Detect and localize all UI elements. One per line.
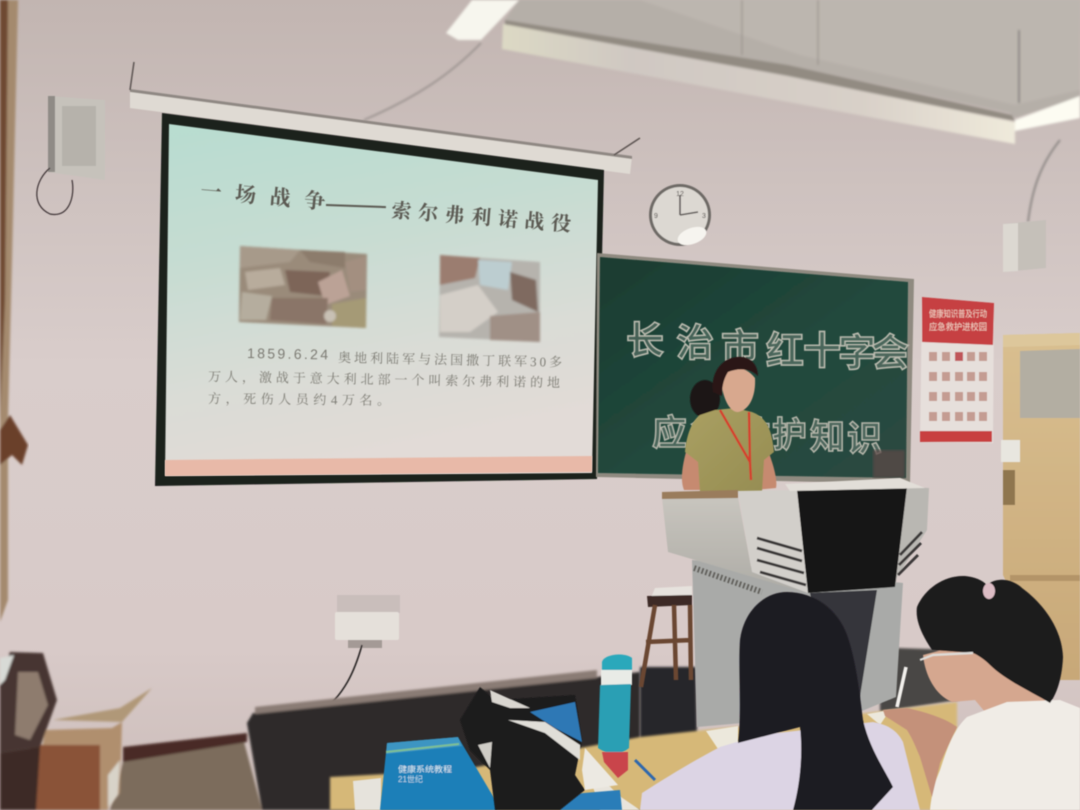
ceiling and fluorescent lamps: [364, 0, 1080, 222]
wall clock: 9: [654, 213, 658, 220]
left student: [640, 592, 920, 810]
presenter face: [720, 368, 755, 412]
wooden stool: [641, 586, 692, 687]
wooden door: [1001, 333, 1080, 680]
projection screen: [155, 113, 604, 486]
slide body text: [208, 345, 562, 409]
chalk subheading: 应急救护知识: [652, 414, 882, 459]
slide battle painting right: [439, 255, 540, 342]
slide bottom pink bar: [165, 456, 592, 476]
projector screen housing: [130, 62, 640, 174]
lectern monitor: [797, 487, 907, 593]
right student glasses: [920, 653, 973, 660]
student desk: [330, 702, 957, 810]
lectern right face: [895, 487, 929, 587]
red chalk seal: [873, 450, 905, 478]
first aid poster: [920, 297, 994, 443]
right wall speaker: [1003, 220, 1046, 272]
blackboard: [596, 253, 914, 484]
first aid poster: 健康知识普及行动: [929, 308, 987, 319]
lectern wood top edge: [662, 490, 738, 499]
power socket and cable: [318, 595, 400, 715]
presenter: [682, 357, 776, 492]
wall clock: 12: [676, 191, 684, 198]
right student pen: [897, 667, 906, 707]
board surface: [596, 253, 914, 484]
teal water bottle: [598, 655, 655, 780]
slide body text: 万人，激战于意大利北部一个叫索尔弗利诺的地: [208, 369, 560, 391]
slide title: 索尔弗利诺战役: [390, 198, 572, 236]
left student hair: [738, 592, 893, 810]
right student face and neck: [923, 640, 1045, 712]
lectern vents: [757, 532, 922, 585]
lectern left face: [662, 497, 807, 593]
cardboard box and bag at left: [0, 652, 152, 810]
first aid poster: 应急救护进校园: [929, 321, 987, 332]
right student hair: [917, 576, 1063, 703]
papers on desk: [353, 710, 890, 810]
slide body text: 方，死伤人员约4万名。: [208, 391, 390, 409]
blue textbook: 21世纪: [398, 774, 423, 784]
presenter hair: [713, 357, 758, 396]
chalk heading: 长治市红十字会: [626, 321, 909, 375]
slide body text: 奥地利陆军与法国撒丁联军30多: [338, 350, 562, 370]
left wall speaker: [37, 96, 105, 214]
slide surface: [165, 124, 598, 476]
lectern base column: [692, 560, 903, 727]
right student: [883, 576, 1080, 810]
left student shirt: [640, 722, 920, 810]
presenter shirt: [685, 408, 774, 492]
right student hair tie: [983, 583, 995, 599]
curtain at left edge: [0, 0, 28, 622]
right student shirt: [930, 700, 1080, 810]
slide body text: 1859.6.24: [247, 345, 328, 362]
area behind lectern: [640, 648, 958, 745]
wall clock: [649, 184, 711, 249]
right student arm: [883, 708, 957, 797]
presenter arms: [682, 440, 776, 490]
screen frame: [155, 113, 604, 486]
floor and dark wainscot: [110, 670, 640, 810]
lectern centre body: [738, 490, 808, 593]
red lanyard: [720, 410, 751, 480]
black and blue bag: [460, 687, 618, 810]
slide title: [200, 179, 572, 236]
slide battle painting left: [239, 246, 367, 328]
presenter back hair: [690, 380, 720, 418]
slide title: 一场战争: [200, 179, 326, 214]
blue textbook: [380, 737, 622, 810]
blue textbook: 健康系统教程: [398, 764, 452, 774]
lectern: [662, 478, 929, 727]
wall clock: 3: [702, 213, 706, 220]
